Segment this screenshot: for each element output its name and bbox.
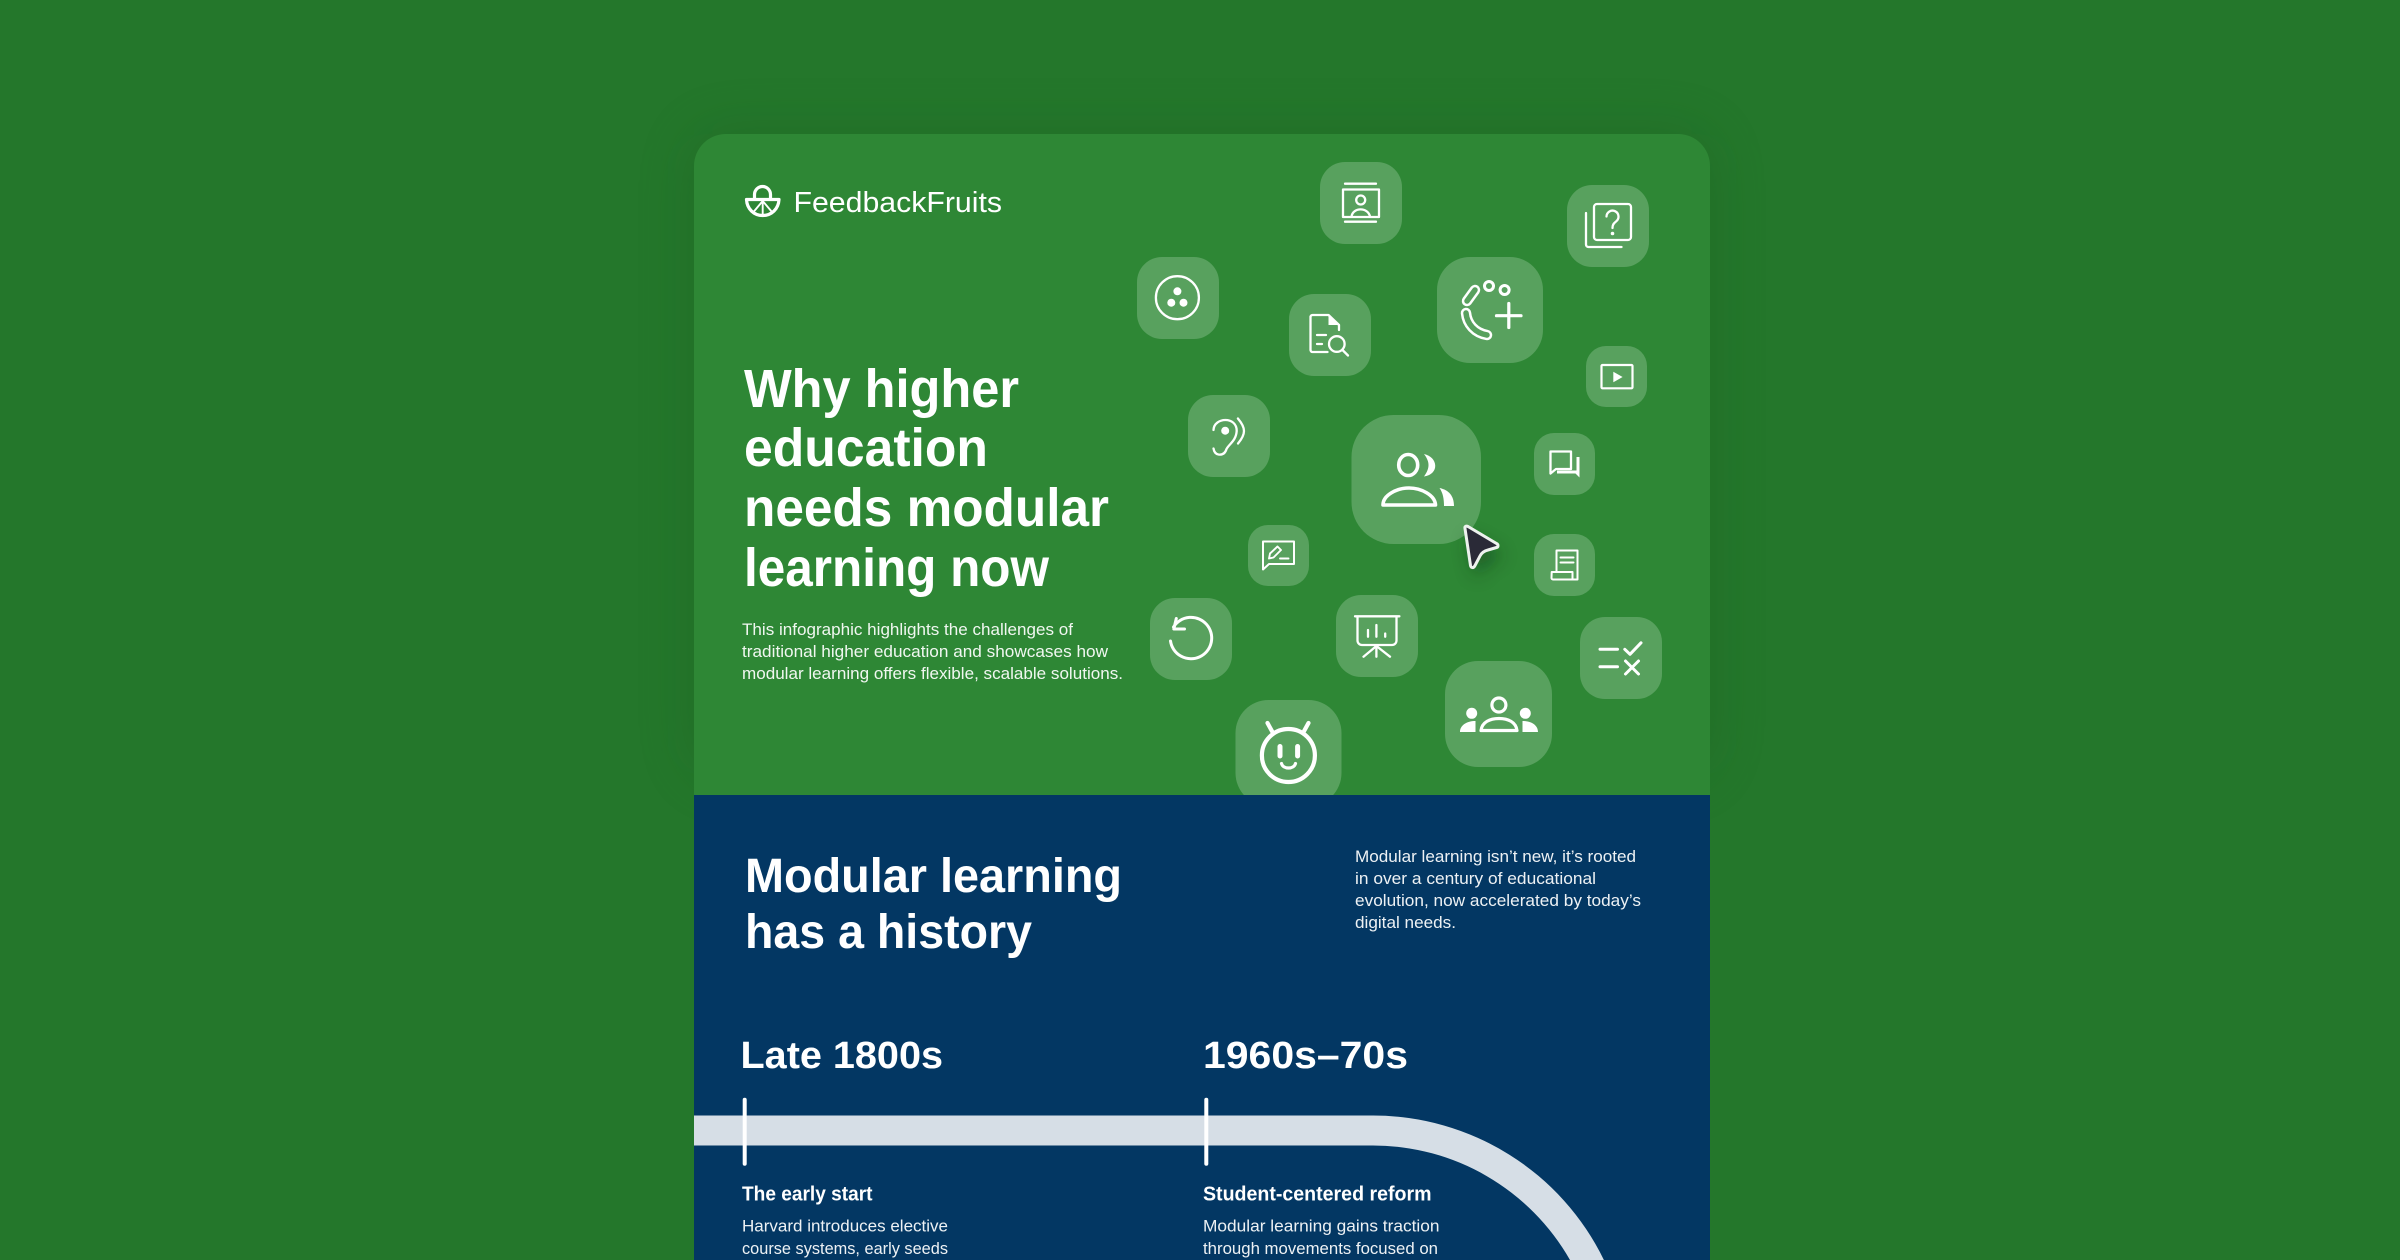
icon: presentation board — [1336, 595, 1418, 677]
icon: robot face — [1236, 700, 1342, 795]
section heading — [745, 850, 1122, 959]
timeline item: 1960s-70s: Student-centered reform — [1203, 1184, 1432, 1206]
icon: scroll — [1534, 534, 1595, 596]
title — [744, 359, 1109, 598]
icon: portrait screen — [1320, 162, 1402, 244]
timeline item: late 1800s: Harvard introduces elective — [742, 1216, 948, 1236]
section intro text: digital needs. — [1355, 913, 1456, 932]
timeline item: 1960s-70s: 1960s–70s — [1203, 1035, 1408, 1077]
icon: students main — [1352, 415, 1481, 544]
intro text: traditional higher education and showcases how — [742, 642, 1109, 661]
section intro text: in over a century of educational — [1355, 869, 1596, 888]
icon: true false — [1580, 617, 1662, 699]
section intro text: Modular learning isn’t new, it’s rooted — [1355, 847, 1636, 866]
icon: reset — [1150, 598, 1232, 680]
timeline item: late 1800s: course systems, early seeds — [742, 1239, 948, 1258]
timeline item: late 1800s: The early start — [742, 1184, 873, 1206]
panel: history — [694, 795, 1710, 1260]
timeline item: late 1800s: Late 1800s — [740, 1035, 943, 1077]
panel: hero — [694, 134, 1710, 806]
icon: video play — [1586, 346, 1647, 407]
section intro text: evolution, now accelerated by today’s — [1355, 891, 1641, 910]
icon: question cards — [1567, 185, 1649, 267]
title: education — [744, 418, 988, 478]
timeline item: late 1800s — [740, 1035, 948, 1258]
timeline item: 1960s-70s: Modular learning gains traction — [1203, 1216, 1440, 1236]
icon: phone plus — [1437, 257, 1543, 363]
section intro text — [1355, 847, 1641, 932]
title: Why higher — [744, 359, 1019, 419]
timeline item: 1960s-70s — [1203, 1035, 1440, 1258]
timeline item: 1960s-70s: through movements focused on — [1203, 1239, 1438, 1258]
intro text: This infographic highlights the challenges of — [742, 620, 1073, 639]
intro text — [742, 620, 1123, 683]
icon: pen message — [1248, 525, 1309, 586]
title: learning now — [744, 538, 1050, 598]
icon: mouse cursor — [1465, 526, 1503, 578]
icon: ear — [1188, 395, 1270, 477]
title: needs modular — [744, 478, 1109, 538]
logo: FeedbackFruits: FeedbackFruits — [794, 187, 1002, 219]
section heading: Modular learning — [745, 850, 1122, 903]
infographic card — [694, 134, 1710, 1260]
section heading: has a history — [745, 906, 1032, 959]
icon: document search — [1289, 294, 1371, 376]
timeline track — [694, 1116, 1604, 1260]
icon: group — [1445, 661, 1552, 767]
icon: circle with dots — [1137, 257, 1219, 339]
intro text: modular learning offers flexible, scalable solutions. — [742, 664, 1123, 683]
icon: chat — [1534, 433, 1595, 495]
